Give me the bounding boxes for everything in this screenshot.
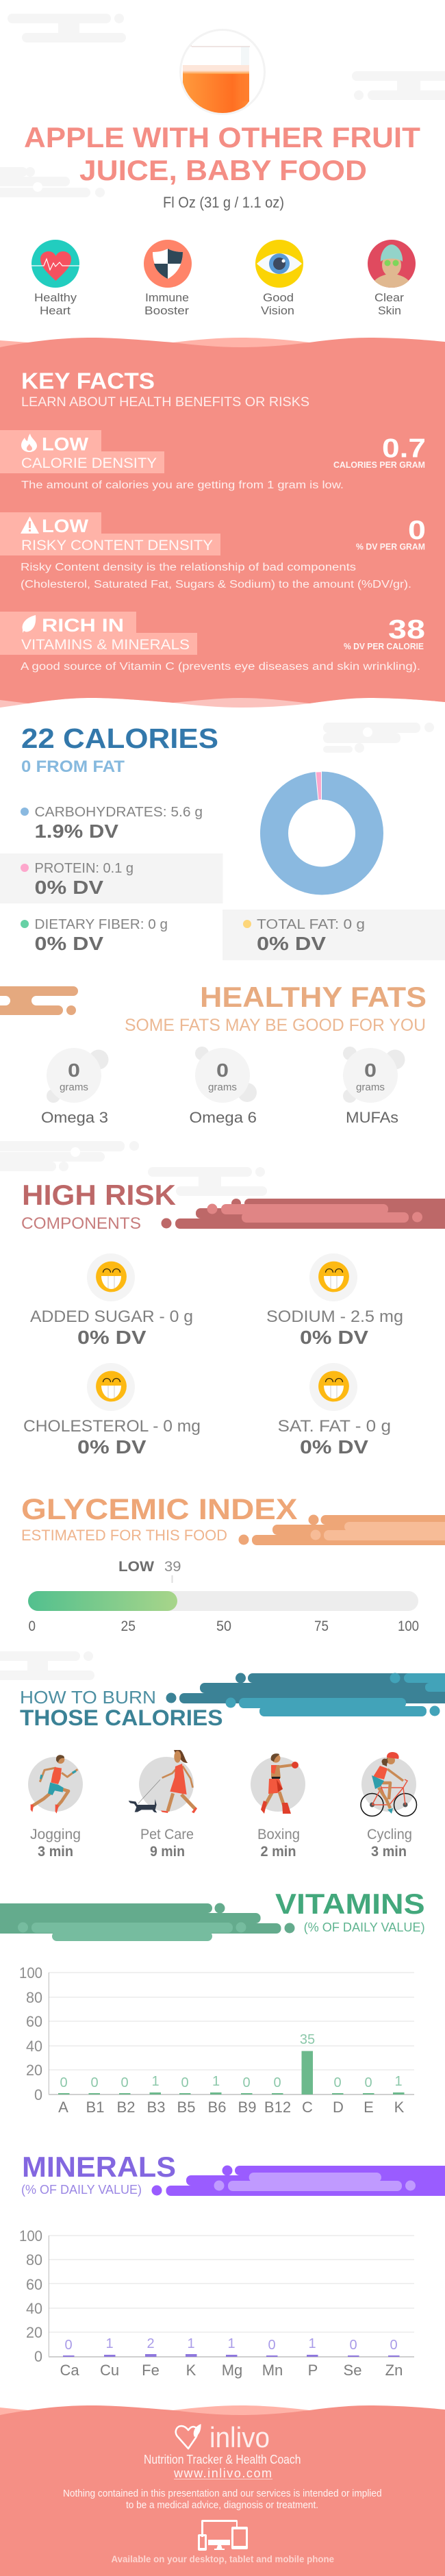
footer text: tagline and link: Nutrition Tracker & Health Coach — [144, 2453, 301, 2466]
stat: omega 6: Omega 6 — [189, 1109, 257, 1126]
heading: calories: 22 CALORIES — [21, 723, 218, 754]
bar chart: vitamins: 0 — [120, 2075, 129, 2090]
background clouds: header — [0, 14, 445, 197]
bar chart: vitamins: 0 — [273, 2075, 281, 2090]
section icon: minerals cloud — [152, 2166, 445, 2196]
gauge: glycemic index: 100 — [398, 1618, 419, 1634]
heading: high risk — [21, 1179, 176, 1233]
benefit: good vision — [255, 240, 303, 317]
benefit: immune booster: Immune — [145, 292, 189, 304]
icon: devices — [198, 2520, 248, 2551]
bar chart: vitamins: D — [333, 2099, 344, 2116]
risk: cholesterol: CHOLESTEROL - 0 mg — [23, 1417, 201, 1436]
bar chart: vitamins: 0 — [242, 2075, 251, 2090]
activity: boxing: 2 min — [260, 1844, 296, 1860]
fact: rich in vitamins and minerals: % DV PER CALORIE — [344, 642, 424, 651]
stat: omega 3 — [41, 1048, 108, 1126]
title: JUICE, BABY FOOD — [79, 154, 367, 186]
risk: cholesterol: 0% DV — [77, 1436, 147, 1458]
bar chart: vitamins: 100 — [19, 1964, 42, 1981]
heading: high risk: HIGH RISK — [22, 1179, 176, 1211]
fact: low risky content density — [0, 512, 426, 590]
bar chart: vitamins: 40 — [26, 2038, 42, 2055]
fact: rich in vitamins and minerals: RICH IN — [42, 615, 124, 636]
food image: glass of juice — [181, 30, 264, 116]
bar chart: vitamins: 35 — [300, 2032, 315, 2047]
gauge: glycemic index: 39 — [164, 1559, 181, 1575]
section icon: vitamins cloud — [0, 1903, 294, 1941]
fact: rich in vitamins and minerals: 38 — [388, 615, 425, 645]
benefit: healthy heart — [31, 240, 79, 317]
benefit: good vision: Good — [263, 292, 294, 304]
title: APPLE WITH OTHER FRUIT — [24, 121, 420, 153]
logo: inlivo — [176, 2421, 270, 2453]
fact: low calorie density: CALORIE DENSITY — [21, 455, 157, 471]
bar chart: minerals: Cu — [100, 2362, 119, 2379]
footer text: tagline and link — [144, 2453, 301, 2480]
bar chart: minerals: 20 — [26, 2324, 42, 2341]
benefit: clear skin — [368, 240, 416, 317]
heading: how to burn those calories: HOW TO BURN — [20, 1687, 156, 1708]
bar chart: minerals: 1 — [187, 2336, 195, 2351]
bar chart: minerals: Fe — [142, 2362, 160, 2379]
bar chart: minerals: 60 — [26, 2276, 42, 2293]
bar chart: vitamins: C — [302, 2099, 313, 2116]
bar chart: minerals: K — [186, 2362, 196, 2379]
heading: key facts: LEARN ABOUT HEALTH BENEFITS OR RISKS — [21, 395, 309, 410]
activity: cycling: Cycling — [367, 1827, 412, 1842]
risk: sodium — [266, 1253, 403, 1348]
footer text: disclaimer: to be a medical advice, diagnosis or treatment. — [126, 2500, 318, 2511]
footer text: tagline and link: www.inlivo.com — [173, 2466, 272, 2480]
fact: rich in vitamins and minerals: A good source of Vitamin C (prevents eye diseases and skin wrinkling). — [21, 661, 420, 673]
bar chart: minerals: Mn — [262, 2362, 283, 2379]
activity: pet care: 9 min — [150, 1844, 185, 1860]
heading: glycemic index: ESTIMATED FOR THIS FOOD — [21, 1527, 227, 1544]
gauge: glycemic index — [28, 1559, 419, 1634]
stat: protein — [0, 853, 223, 903]
bar chart: vitamins: B9 — [238, 2099, 256, 2116]
background cloud: calories — [323, 723, 434, 753]
benefit: healthy heart: Heart — [40, 305, 71, 317]
heading: key facts: KEY FACTS — [21, 368, 155, 393]
stat: carbohydrates: CARBOHYDRATES: 5.6 g — [34, 805, 203, 820]
footer text: availability: Available on your desktop, tablet and mobile phone — [111, 2553, 334, 2564]
risk: added sugar: 0% DV — [77, 1327, 147, 1348]
heading: high risk: COMPONENTS — [21, 1214, 141, 1233]
bar chart: vitamins: B12 — [264, 2099, 291, 2116]
stat: carbohydrates: 1.9% DV — [34, 821, 118, 842]
bar chart: minerals: 0 — [34, 2348, 42, 2365]
gauge: glycemic index: 0 — [29, 1618, 36, 1634]
bar chart: minerals: 100 — [19, 2227, 42, 2244]
fact: low calorie density: LOW — [42, 434, 89, 455]
bar chart: vitamins: 0 — [34, 2086, 42, 2103]
bar chart: vitamins — [19, 1964, 414, 2116]
risk: sodium: SODIUM - 2.5 mg — [266, 1308, 403, 1326]
benefit: clear skin: Skin — [378, 305, 401, 317]
heading: minerals — [21, 2151, 176, 2197]
fact: low risky content density: Risky Content density is the relationship of bad components — [21, 562, 356, 573]
fact: low risky content density: 0 — [408, 516, 426, 545]
bar chart: vitamins: B3 — [147, 2099, 165, 2116]
bar chart: minerals: 0 — [268, 2338, 276, 2353]
bar chart: vitamins: 0 — [181, 2075, 189, 2090]
stat: protein: PROTEIN: 0.1 g — [34, 861, 134, 876]
activity: cycling: 3 min — [371, 1844, 407, 1860]
gauge: glycemic index: 75 — [314, 1618, 329, 1634]
heading: healthy fats — [125, 981, 427, 1035]
stat: carbohydrates — [21, 805, 203, 842]
stat: omega 6: 0 — [216, 1060, 229, 1081]
stat: MUFAs: grams — [356, 1081, 385, 1093]
bar chart: vitamins: A — [58, 2099, 68, 2116]
risk: added sugar — [30, 1253, 193, 1348]
stat: dietary fiber: DIETARY FIBER: 0 g — [34, 917, 168, 932]
heading: healthy fats: SOME FATS MAY BE GOOD FOR YOU — [125, 1016, 426, 1035]
stat: omega 6 — [189, 1047, 257, 1126]
heading: glycemic index: GLYCEMIC INDEX — [21, 1493, 298, 1526]
bar chart: vitamins: K — [394, 2099, 405, 2116]
bar chart: minerals: 0 — [390, 2338, 398, 2353]
risk: saturated fat: 0% DV — [300, 1436, 368, 1458]
bar chart: minerals: 40 — [26, 2300, 42, 2317]
heading: how to burn those calories: THOSE CALORIES — [20, 1705, 223, 1730]
fact: low risky content density: (Cholesterol, Saturated Fat, Sugars & Sodium) to the amount (%DV/gr). — [21, 579, 411, 590]
background clouds: between fats and risk — [0, 1141, 267, 1196]
risk: cholesterol — [23, 1363, 201, 1458]
bar chart: vitamins: 60 — [26, 2013, 42, 2030]
section icon: burn cloud — [166, 1673, 445, 1716]
activity: pet care — [129, 1750, 197, 1860]
risk: saturated fat: SAT. FAT - 0 g — [278, 1417, 391, 1436]
stat: MUFAs: MUFAs — [346, 1109, 398, 1126]
fact: rich in vitamins and minerals: VITAMINS & MINERALS — [21, 637, 190, 653]
benefit: healthy heart: Healthy — [34, 292, 77, 304]
donut chart: macronutrients — [274, 772, 370, 881]
bar chart: vitamins: B2 — [117, 2099, 135, 2116]
bar chart: vitamins: 80 — [26, 1989, 42, 2006]
bar chart: minerals: 2 — [147, 2336, 155, 2351]
stat: MUFAs — [343, 1047, 405, 1126]
bar chart: minerals: Mg — [222, 2362, 242, 2379]
activity: boxing — [251, 1753, 305, 1860]
bar chart: minerals: Se — [344, 2362, 361, 2379]
stat: dietary fiber: 0% DV — [34, 933, 103, 954]
stat: total fat: TOTAL FAT: 0 g — [257, 917, 365, 932]
benefit: immune booster: Booster — [144, 305, 190, 317]
section icon: high risk cloud — [162, 1199, 445, 1229]
bar chart: vitamins: 1 — [212, 2074, 220, 2089]
stat: omega 3: grams — [60, 1081, 88, 1093]
benefit: clear skin: Clear — [374, 292, 405, 304]
logo: inlivo: inlivo — [209, 2421, 270, 2453]
fact: low risky content density: LOW — [42, 516, 89, 536]
title — [24, 121, 420, 186]
fact: low calorie density: 0.7 — [382, 434, 426, 463]
heading: minerals: (% OF DAILY VALUE) — [21, 2183, 142, 2197]
bar chart: vitamins: B1 — [86, 2099, 104, 2116]
risk: added sugar: ADDED SUGAR - 0 g — [30, 1308, 193, 1326]
fact: low risky content density: RISKY CONTENT DENSITY — [21, 538, 213, 553]
benefit: good vision: Vision — [261, 305, 294, 317]
bar chart: vitamins: B6 — [208, 2099, 226, 2116]
stat: total fat — [222, 910, 445, 960]
heading: calories: 0 FROM FAT — [21, 758, 125, 776]
heading: healthy fats: HEALTHY FATS — [200, 981, 427, 1013]
section icon: healthy fats cloud — [0, 986, 78, 1015]
bar chart: minerals: Zn — [385, 2362, 403, 2379]
benefit: immune booster — [144, 240, 192, 317]
bar chart: vitamins: 0 — [90, 2075, 99, 2090]
risk: saturated fat — [278, 1363, 391, 1458]
bar chart: minerals: P — [308, 2362, 318, 2379]
bar chart: vitamins: 1 — [151, 2074, 160, 2089]
gauge: glycemic index: 50 — [216, 1618, 231, 1634]
activity: cycling — [361, 1752, 416, 1860]
bar chart: minerals — [19, 2227, 414, 2379]
footer panel — [0, 2405, 445, 2576]
stat: omega 3: 0 — [68, 1060, 80, 1081]
panel: key facts — [0, 338, 445, 708]
bar chart: minerals: 1 — [105, 2336, 114, 2351]
gauge: glycemic index: 25 — [120, 1618, 136, 1634]
stat: omega 3: Omega 3 — [41, 1109, 108, 1126]
activity: boxing: Boxing — [257, 1827, 300, 1842]
heading: vitamins: (% OF DAILY VALUE) — [304, 1921, 425, 1934]
fact: rich in vitamins and minerals — [0, 612, 425, 673]
bar chart: minerals: 80 — [26, 2251, 42, 2268]
bar chart: vitamins: 1 — [394, 2074, 403, 2089]
serving size: Fl Oz (31 g / 1.1 oz) — [163, 194, 284, 211]
heading: key facts — [21, 368, 309, 410]
stat: total fat: 0% DV — [257, 933, 326, 954]
background cloud: burn — [0, 1651, 94, 1680]
footer text: disclaimer — [63, 2488, 382, 2511]
heading: vitamins: VITAMINS — [275, 1888, 425, 1920]
stat: dietary fiber — [21, 917, 168, 954]
footer text: disclaimer: Nothing contained in this presentation and our services is intended or implied — [63, 2488, 382, 2499]
bar chart: vitamins: E — [364, 2099, 374, 2116]
bar chart: minerals: 0 — [64, 2338, 73, 2353]
bar chart: minerals: 1 — [308, 2336, 316, 2351]
bar chart: vitamins: 20 — [26, 2062, 42, 2079]
stat: omega 6: grams — [208, 1081, 237, 1093]
bar chart: minerals: 1 — [227, 2336, 236, 2351]
activity: pet care: Pet Care — [140, 1827, 194, 1842]
activity: jogging: 3 min — [38, 1844, 73, 1860]
activity: jogging — [28, 1755, 83, 1860]
fact: low calorie density: CALORIES PER GRAM — [333, 460, 425, 470]
stat: MUFAs: 0 — [364, 1060, 377, 1081]
bar chart: minerals: 0 — [349, 2338, 357, 2353]
heading: calories — [21, 723, 218, 776]
fact: low calorie density — [0, 430, 426, 491]
fact: low risky content density: % DV PER GRAM — [356, 542, 425, 552]
heading: vitamins — [275, 1888, 425, 1934]
heading: minerals: MINERALS — [22, 2151, 176, 2183]
bar chart: minerals: Ca — [60, 2362, 79, 2379]
heading: how to burn those calories — [20, 1687, 223, 1730]
bar chart: vitamins: 0 — [333, 2075, 342, 2090]
stat: protein: 0% DV — [34, 877, 103, 898]
heading: glycemic index — [21, 1493, 298, 1544]
gauge: glycemic index: LOW — [118, 1559, 154, 1575]
risk: sodium: 0% DV — [300, 1327, 368, 1348]
fact: low calorie density: The amount of calories you are getting from 1 gram is low. — [21, 479, 344, 491]
bar chart: vitamins: B5 — [177, 2099, 195, 2116]
activity: jogging: Jogging — [30, 1827, 81, 1842]
bar chart: vitamins: 0 — [364, 2075, 372, 2090]
section icon: glycemic cloud — [238, 1515, 445, 1545]
bar chart: vitamins: 0 — [60, 2075, 68, 2090]
